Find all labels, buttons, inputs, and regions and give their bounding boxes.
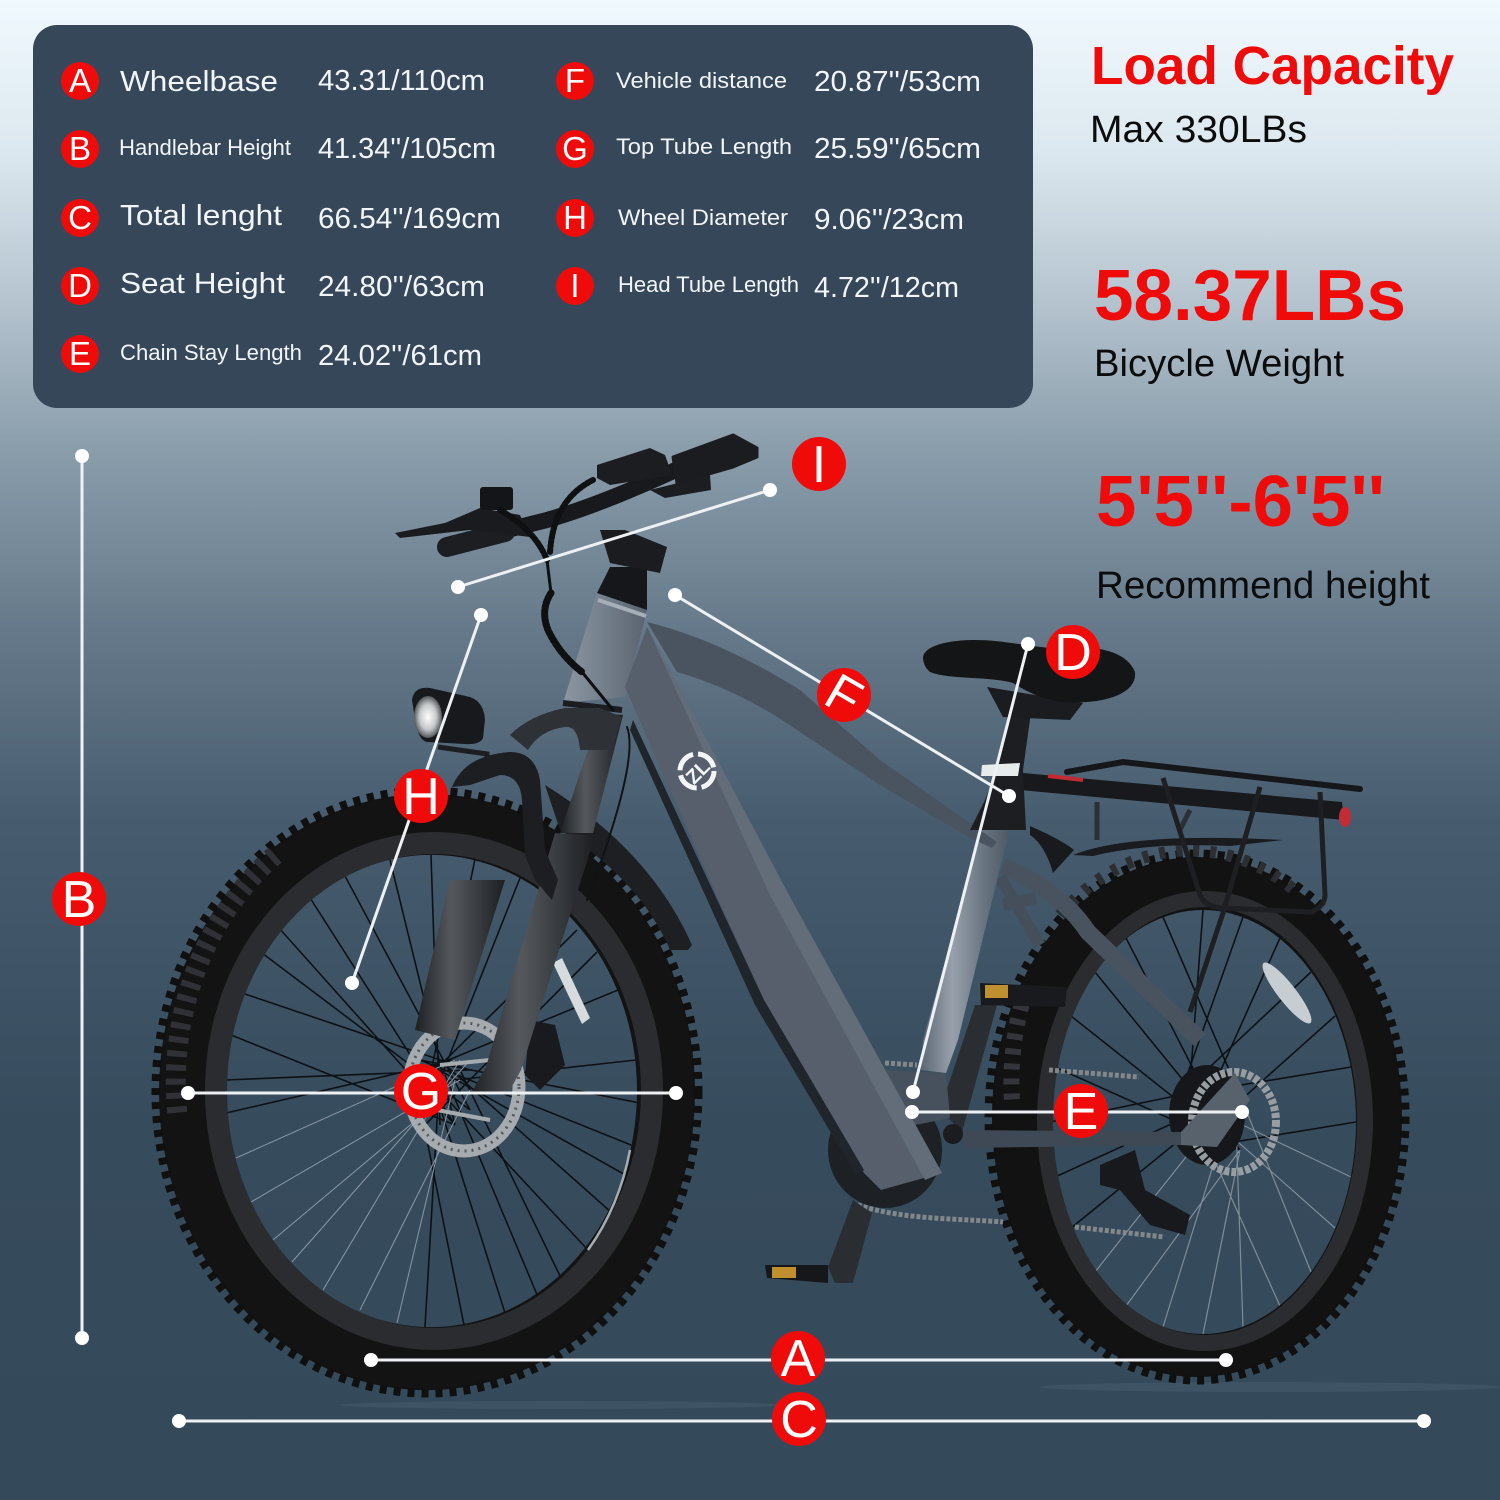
stat: bicycle weight: 58.37LBs	[1094, 256, 1406, 336]
row I head tube length: I	[570, 267, 580, 304]
row C total length	[61, 199, 501, 237]
row H wheel diameter: 9.06''/23cm	[814, 204, 964, 236]
rear wheel	[989, 850, 1405, 1380]
row D seat height: D	[68, 267, 92, 304]
right brake lever	[597, 448, 711, 498]
panel: dimensions table	[33, 25, 1033, 408]
dimension line F	[668, 588, 1016, 803]
row F vehicle distance: F	[565, 62, 585, 99]
bottom bracket box	[885, 1070, 950, 1125]
row B handlebar height: 41.34''/105cm	[318, 133, 496, 165]
heading: load capacity: Max 330LBs	[1090, 109, 1307, 151]
row E chain stay length: E	[69, 335, 91, 372]
dimension line E: E	[1064, 1083, 1098, 1141]
pivot	[943, 1124, 963, 1144]
row A wheelbase: A	[69, 62, 91, 99]
dimension line E	[905, 1083, 1249, 1141]
heading: load capacity	[1090, 36, 1454, 151]
seat post	[970, 705, 1032, 830]
row H wheel diameter: H	[563, 199, 587, 236]
dimension line G	[181, 1063, 683, 1121]
fork lower leg	[470, 833, 595, 1095]
stat: recommended height: 5'5''-6'5''	[1096, 462, 1385, 542]
row I head tube length	[556, 267, 959, 305]
fender bracket	[452, 752, 558, 900]
row E chain stay length	[61, 335, 482, 373]
dimension line H	[345, 608, 488, 990]
rear mudguard and rack	[1020, 762, 1360, 1012]
row F vehicle distance: Vehicle distance	[616, 68, 787, 93]
dimension line B: B	[62, 871, 96, 929]
dimension line D: D	[1054, 624, 1092, 682]
stat: recommended height	[1096, 462, 1430, 607]
rear cassette	[1169, 1065, 1245, 1165]
front mudguard	[545, 785, 692, 950]
row C total length: 66.54''/169cm	[318, 203, 501, 235]
rear fork leg	[415, 880, 505, 1040]
row G top tube length: G	[562, 130, 588, 167]
right grip	[673, 435, 757, 483]
row D seat height	[61, 267, 485, 305]
front wheel	[156, 791, 698, 1393]
row C total length: Total lenght	[120, 200, 282, 232]
front rotor	[409, 1023, 519, 1151]
row B handlebar height	[61, 130, 496, 168]
rear dropout	[1181, 1073, 1250, 1147]
row G top tube length: 25.59''/65cm	[814, 133, 981, 165]
chain	[852, 1063, 1164, 1237]
fork brake caliper	[525, 1020, 565, 1090]
row G top tube length: Top Tube Length	[616, 134, 792, 159]
row A wheelbase	[61, 62, 485, 100]
crank and pedal	[765, 1200, 872, 1283]
brake cables	[500, 480, 630, 900]
bottom bracket strut	[940, 1005, 997, 1132]
rear reflector	[1257, 958, 1317, 1028]
battery down tube	[625, 627, 942, 1190]
dimension line C: C	[780, 1391, 818, 1449]
row B handlebar height: Handlebar Height	[119, 135, 291, 160]
dimension line H: H	[402, 768, 440, 826]
lower seat stay	[1000, 877, 1040, 945]
saddle	[923, 640, 1135, 720]
logo: ZL	[682, 756, 715, 789]
dimension line G: G	[401, 1063, 441, 1121]
stat: recommended height: Recommend height	[1096, 565, 1430, 607]
fork stanchion	[560, 713, 623, 833]
row A wheelbase: Wheelbase	[120, 66, 278, 98]
row D seat height: Seat Height	[120, 268, 285, 300]
row H wheel diameter	[556, 199, 964, 237]
dimension line I	[451, 436, 846, 594]
left grip and brake	[447, 532, 505, 547]
chain stay	[963, 1130, 1181, 1148]
rear pedal	[980, 983, 1067, 1007]
top tube	[647, 622, 997, 848]
head tube	[563, 593, 647, 710]
dimension line A	[364, 1330, 1233, 1388]
headlight	[412, 688, 488, 768]
display	[480, 487, 513, 510]
row D seat height: 24.80''/63cm	[318, 271, 485, 303]
row B handlebar height: B	[69, 130, 91, 167]
row E chain stay length: Chain Stay Length	[120, 340, 302, 365]
row F vehicle distance	[556, 62, 981, 100]
row F vehicle distance: 20.87''/53cm	[814, 66, 981, 98]
dimension line A: A	[781, 1330, 816, 1388]
row E chain stay length: 24.02''/61cm	[318, 340, 482, 372]
fork	[415, 708, 623, 1095]
row A wheelbase: 43.31/110cm	[318, 65, 485, 97]
seat clamp	[981, 763, 1020, 776]
row I head tube length: 4.72''/12cm	[814, 272, 959, 304]
heading: load capacity: Load Capacity	[1091, 36, 1454, 96]
chainring	[828, 1092, 942, 1208]
dimension line I: I	[812, 436, 826, 494]
illustration: e-bike	[156, 435, 1500, 1409]
dimension line C	[172, 1391, 1431, 1449]
handlebar	[395, 435, 757, 547]
seat stay	[1003, 866, 1200, 1040]
dimension line D	[906, 624, 1100, 1099]
ground shadow	[340, 1382, 1500, 1409]
row C total length: C	[68, 199, 92, 236]
rear rotor	[1192, 1072, 1276, 1172]
stem and steerer	[597, 530, 667, 610]
row H wheel diameter: Wheel Diameter	[618, 205, 788, 230]
rear reflector light	[1339, 807, 1351, 827]
stat: bicycle weight: Bicycle Weight	[1094, 343, 1344, 385]
row G top tube length	[556, 130, 981, 168]
row I head tube length: Head Tube Length	[618, 272, 799, 297]
stat: bicycle weight	[1094, 256, 1406, 385]
front reflector	[553, 958, 590, 1024]
seat tube	[921, 827, 1010, 1073]
dimension line B	[52, 449, 106, 1345]
rear derailleur	[1100, 1150, 1190, 1235]
fork crown	[510, 708, 622, 750]
dimension line F: F	[815, 663, 872, 729]
